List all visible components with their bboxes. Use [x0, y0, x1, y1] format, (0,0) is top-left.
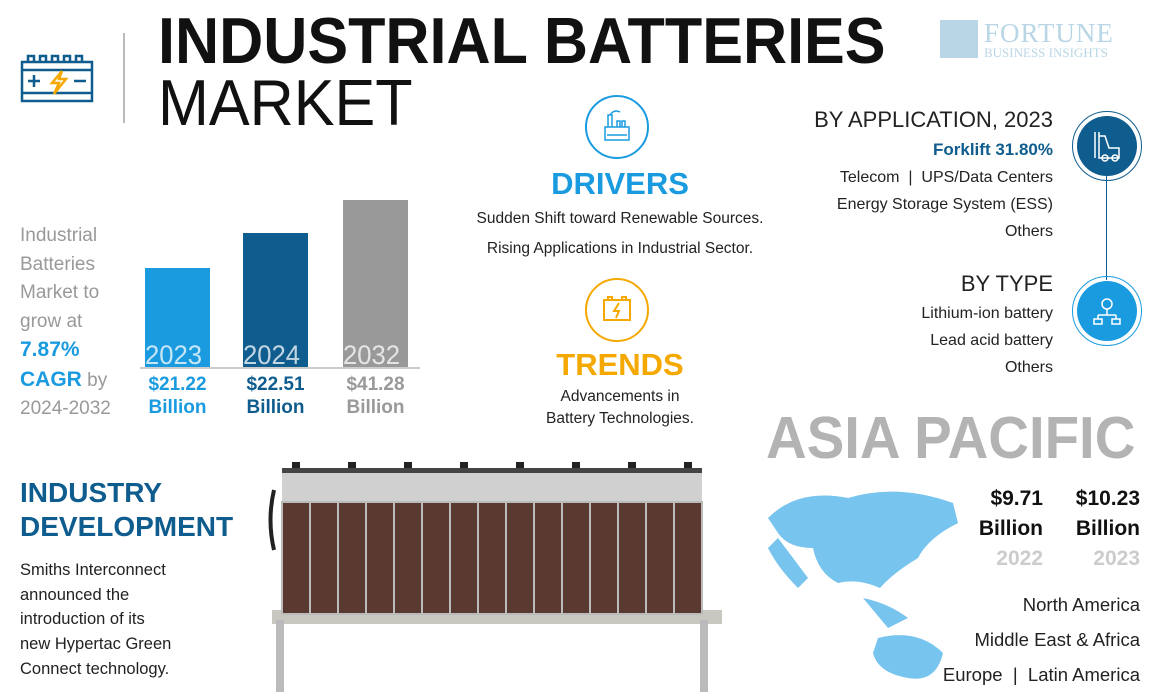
industry text: new Hypertac Green [20, 635, 171, 653]
values [979, 487, 1043, 570]
text: CAGR [20, 225, 111, 419]
bar chart: 2023 [145, 340, 202, 370]
trends text: Battery Technologies. [546, 410, 694, 427]
title: INDUSTRIAL BATTERIES [158, 4, 886, 77]
by application: Forklift 31.80% [933, 140, 1053, 159]
trends text [546, 388, 694, 427]
bar chart: $22.51 [246, 374, 305, 395]
drivers text: Rising Applications in Industrial Sector. [487, 240, 753, 257]
values: Billion [979, 517, 1043, 540]
icon: type [1072, 276, 1142, 346]
by application [814, 107, 1053, 240]
regions: Middle East & Africa [974, 629, 1140, 650]
image: batteries [268, 462, 722, 692]
industry development heading: INDUSTRY [20, 477, 162, 508]
bar chart: Billion [148, 397, 207, 418]
drivers heading: DRIVERS [551, 166, 689, 201]
regions [943, 594, 1140, 685]
values: $9.71 [990, 487, 1043, 510]
text: 2023 [1093, 547, 1140, 570]
by type: Lithium-ion battery [921, 305, 1053, 322]
text: $10.23 [1076, 487, 1140, 510]
by type: Lead acid battery [930, 332, 1053, 349]
regions: North America [1023, 594, 1140, 615]
text: CAGR: 2024-2032 [20, 398, 111, 419]
text: CAGR: grow at [20, 310, 82, 332]
by type [921, 271, 1053, 376]
trends text: Advancements in [561, 388, 679, 405]
connector [1106, 175, 1107, 280]
industry text: introduction of its [20, 610, 145, 628]
by application: BY APPLICATION, 2023 [814, 107, 1053, 132]
logo: FORTUNE [984, 18, 1114, 48]
logo [940, 18, 1114, 60]
region heading: ASIA PACIFIC [766, 405, 1135, 471]
drivers text: Sudden Shift toward Renewable Sources. [477, 210, 763, 227]
bar chart: $41.28 [346, 374, 405, 395]
icon: drivers [585, 95, 649, 159]
by application: Telecom | UPS/Data Centers [840, 169, 1053, 186]
industry text: Connect technology. [20, 660, 169, 678]
title [158, 4, 886, 139]
industry text: announced the [20, 586, 129, 604]
industry development heading [20, 477, 233, 542]
by type: BY TYPE [961, 271, 1053, 296]
text: CAGR: Industrial [20, 225, 97, 246]
bar chart [140, 200, 420, 418]
text: CAGR: 7.87% [20, 338, 80, 361]
title: MARKET [158, 66, 413, 139]
industry text [20, 561, 171, 678]
drivers text [477, 210, 763, 257]
values: 2022 [996, 547, 1043, 570]
industry text: Smiths Interconnect [20, 561, 166, 579]
regions: Europe | Latin America [943, 664, 1140, 685]
text: CAGR: CAGR by [20, 368, 107, 390]
bar chart: $21.22 [148, 374, 207, 395]
by type: Others [1005, 359, 1053, 376]
bar chart: 2024 [243, 340, 300, 370]
by application: Energy Storage System (ESS) [837, 196, 1053, 213]
icon: forklift [1072, 111, 1142, 181]
by application: Others [1005, 223, 1053, 240]
icon: battery [20, 54, 94, 102]
bar chart: 2032 [343, 340, 400, 370]
trends heading: TRENDS [556, 347, 684, 382]
bar chart: Billion [346, 397, 405, 418]
icon: trends [585, 278, 649, 342]
text: Billion [1076, 517, 1140, 540]
text: CAGR: Market to [20, 282, 99, 303]
map [768, 492, 958, 679]
text: CAGR: Batteries [20, 254, 95, 274]
bar chart: Billion [246, 397, 305, 418]
industry development heading: DEVELOPMENT [20, 511, 233, 542]
logo: BUSINESS INSIGHTS [984, 45, 1108, 60]
